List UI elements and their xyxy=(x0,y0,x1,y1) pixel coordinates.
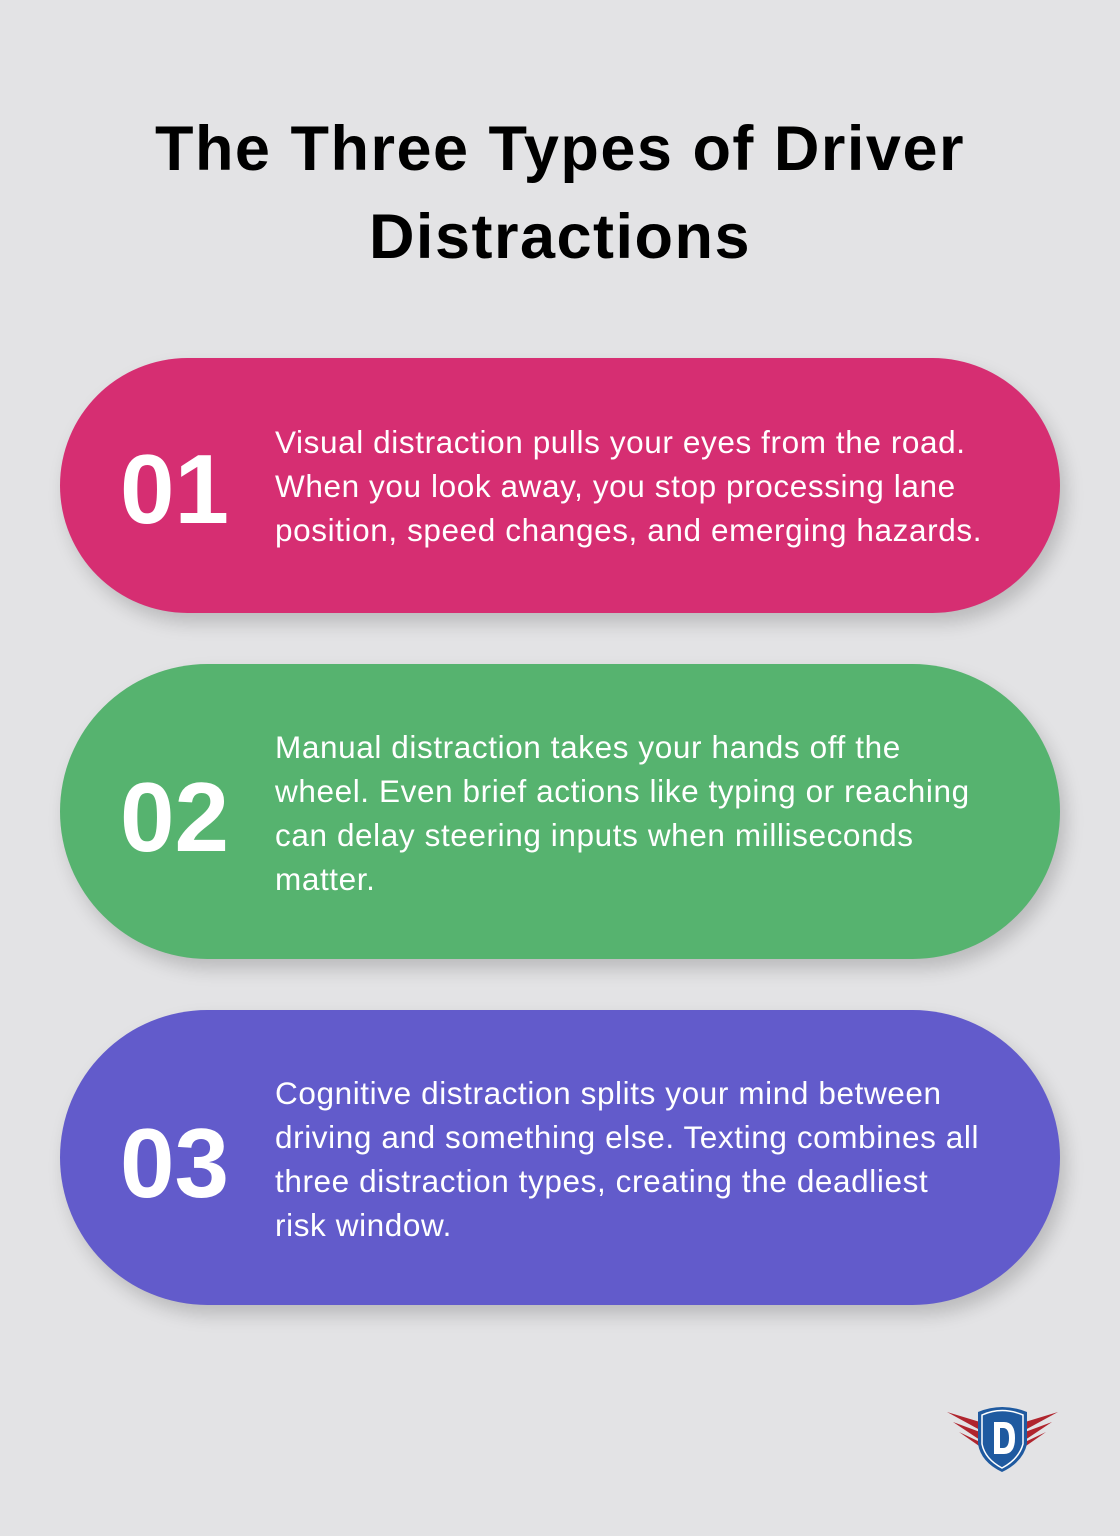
text: cognitive xyxy=(275,1075,979,1243)
text: visual: Visual distraction pulls your eyes from the road. xyxy=(275,424,966,460)
text: cognitive: three distraction types, creating the deadliest xyxy=(275,1163,928,1199)
panel: cognitive xyxy=(60,1010,1060,1305)
number 03: 03 xyxy=(120,1108,229,1218)
text: manual: wheel. Even brief actions like typing or reaching xyxy=(275,773,970,809)
text: visual: When you look away, you stop processing lane xyxy=(275,468,956,504)
text: manual: can delay steering inputs when milliseconds xyxy=(275,817,914,853)
panel: visual xyxy=(60,358,1060,613)
text: visual: position, speed changes, and emerging hazards. xyxy=(275,512,982,548)
number 02: 02 xyxy=(120,762,229,872)
text: manual: Manual distraction takes your hands off the xyxy=(275,729,901,765)
text: manual: matter. xyxy=(275,861,375,897)
text: cognitive: driving and something else. Texting combines all xyxy=(275,1119,979,1155)
text: visual xyxy=(275,424,982,548)
text: cognitive: Cognitive distraction splits your mind between xyxy=(275,1075,942,1111)
title xyxy=(155,114,965,272)
logo xyxy=(947,1407,1058,1472)
text: cognitive: risk window. xyxy=(275,1207,452,1243)
number 01: 01 xyxy=(120,434,229,544)
title: The Three Types of Driver xyxy=(155,114,965,184)
text: manual xyxy=(275,729,970,897)
title: Distractions xyxy=(369,202,751,272)
panel: manual xyxy=(60,664,1060,959)
